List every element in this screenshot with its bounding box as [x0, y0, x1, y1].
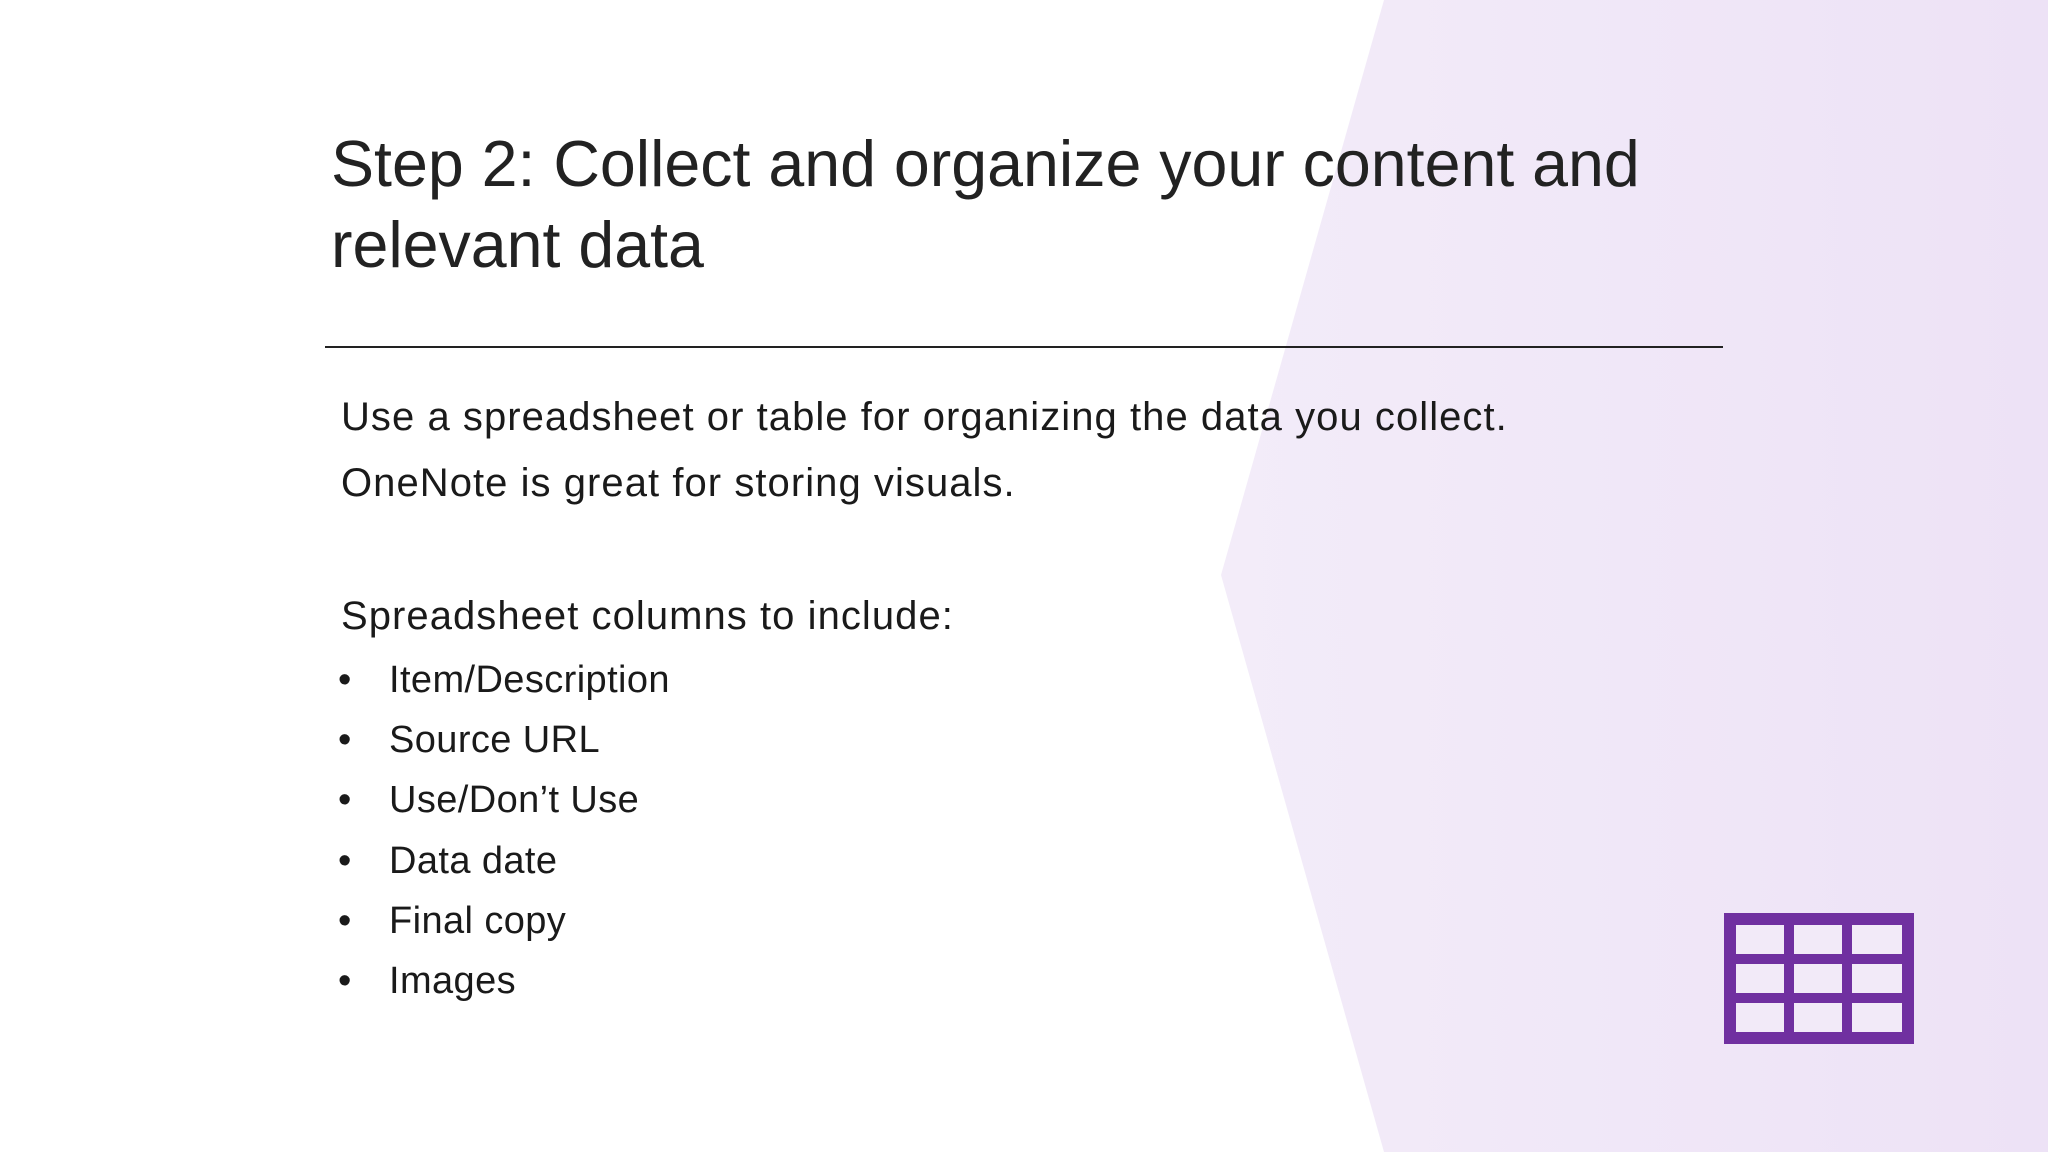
title: relevant data	[331, 209, 704, 281]
bullet list: •	[338, 719, 352, 761]
intro text: OneNote is great for storing visuals.	[341, 461, 1016, 505]
intro text	[341, 395, 1508, 505]
title	[331, 128, 1640, 281]
title: Step 2: Collect and organize your content and	[331, 128, 1640, 200]
bullet list: •	[338, 659, 352, 701]
bullet list: •	[338, 779, 352, 821]
icon: table grid	[1724, 913, 1914, 1044]
bullet list: Images	[389, 960, 516, 1002]
bullet list: Item/Description	[389, 659, 670, 701]
subheading: Spreadsheet columns to include:	[341, 594, 954, 638]
bullet list	[338, 659, 670, 1002]
intro text: Use a spreadsheet or table for organizing the data you collect.	[341, 395, 1508, 439]
bullet list: Source URL	[389, 719, 600, 761]
divider rule	[325, 346, 1723, 348]
bullet list: •	[338, 840, 352, 882]
bullet list: Data date	[389, 840, 557, 882]
bullet list: Use/Don’t Use	[389, 779, 639, 821]
bullet list: Final copy	[389, 900, 566, 942]
bullet list: •	[338, 900, 352, 942]
bullet list: •	[338, 960, 352, 1002]
